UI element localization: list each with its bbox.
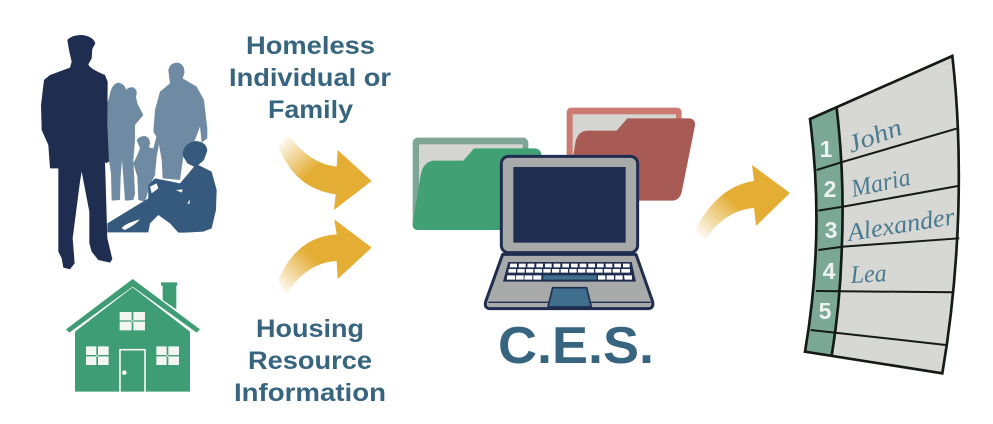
- silhouette: seated person: [107, 141, 217, 233]
- laptop lid: [501, 156, 638, 253]
- title: C.E.S.: C.E.S.: [498, 317, 654, 375]
- list number 4: 4: [823, 258, 836, 284]
- heading: Homeless Individual or Family: Homeless: [246, 32, 375, 60]
- name: Alexander: Alexander: [844, 203, 957, 247]
- list grid lines: [805, 56, 960, 373]
- heading: Housing Resource Information: Resource: [248, 347, 372, 375]
- laptop: [485, 156, 653, 309]
- red folder: [567, 108, 695, 201]
- left window: [86, 346, 109, 365]
- ranked list: [805, 56, 960, 373]
- heading: Homeless Individual or Family: [229, 32, 391, 124]
- list number 5: 5: [819, 298, 832, 324]
- arrow: output arrow: [695, 165, 790, 240]
- green folder: [413, 138, 542, 230]
- icon: green house: [66, 279, 200, 392]
- heading: Housing Resource Information: Information: [234, 379, 386, 407]
- silhouette: woman holding child: [105, 83, 143, 201]
- upper window: [120, 312, 145, 330]
- keyboard: [503, 262, 636, 282]
- laptop base: [485, 254, 653, 309]
- silhouette: standing man: [41, 35, 112, 269]
- heading: Homeless Individual or Family: Family: [268, 96, 353, 124]
- silhouette: small child: [133, 136, 160, 202]
- heading: Housing Resource Information: [234, 315, 386, 407]
- arrow: top input arrow: [278, 134, 372, 210]
- laptop screen: [513, 167, 626, 243]
- base front edge: [488, 300, 651, 304]
- door knob: [122, 370, 127, 375]
- chimney: [161, 282, 177, 309]
- icon: silhouettes of homeless people: [41, 35, 217, 269]
- silhouette: standing adult: [153, 63, 207, 180]
- arrow: bottom input arrow: [278, 219, 372, 295]
- name: Maria: Maria: [848, 164, 913, 203]
- list number 3: 3: [825, 217, 837, 243]
- icon: folders and laptop: [413, 108, 695, 309]
- keyboard keys: [507, 264, 632, 280]
- silhouettes: family and seated person: [105, 63, 217, 233]
- name: Lea: Lea: [849, 260, 887, 289]
- list sheet: [805, 56, 959, 373]
- name: John: John: [844, 114, 906, 159]
- roof: [66, 279, 200, 333]
- right window: [156, 346, 179, 365]
- door: [120, 350, 145, 392]
- house body: [75, 287, 190, 392]
- list number 2: 2: [824, 176, 836, 202]
- list number 1: 1: [820, 136, 833, 162]
- heading: Homeless Individual or Family: Individual or: [229, 64, 391, 92]
- number column: [805, 108, 843, 356]
- heading: Housing Resource Information: Housing: [256, 315, 364, 343]
- trackpad: [548, 288, 591, 307]
- space bar: [543, 275, 597, 280]
